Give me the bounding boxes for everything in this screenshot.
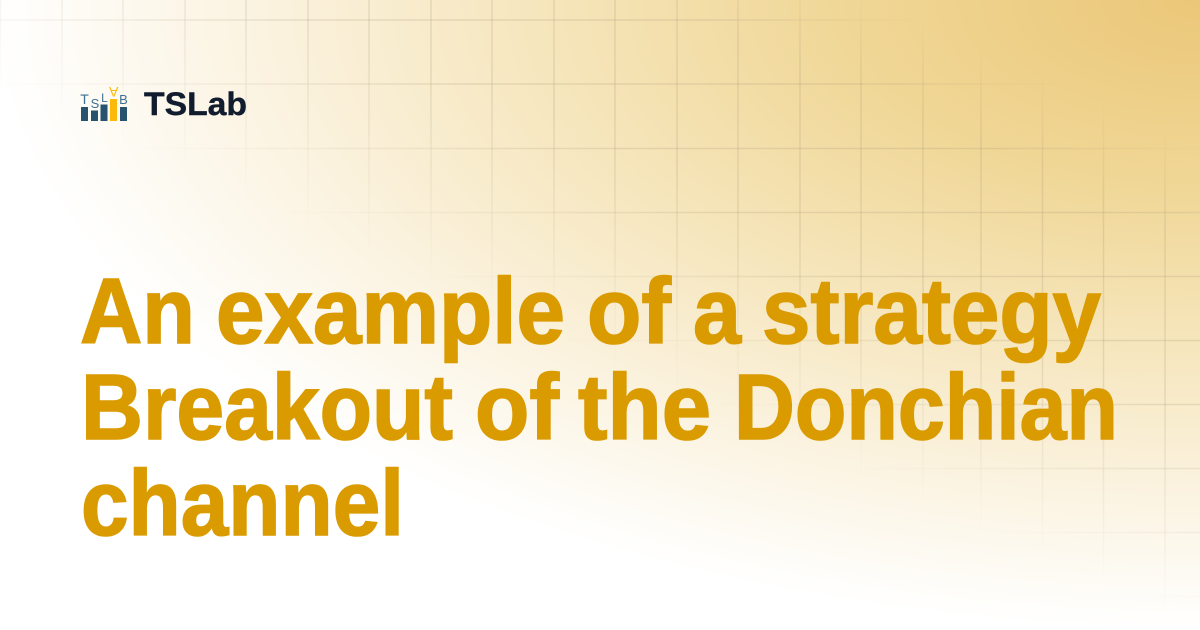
title: An	[80, 259, 195, 363]
title: Breakout	[81, 355, 453, 459]
logo: TSLab	[80, 84, 247, 122]
title	[80, 259, 1118, 555]
title: of	[475, 355, 560, 459]
icon: bar chart logo: T	[80, 91, 89, 107]
icon: bar chart logo: A	[108, 84, 118, 100]
title: of	[587, 259, 672, 363]
icon: bar chart logo: S	[91, 96, 100, 111]
icon: bar chart logo: L	[101, 91, 108, 105]
title: strategy	[762, 259, 1101, 363]
logo wordmark: TSLab	[144, 86, 247, 122]
title: Donchian	[734, 355, 1118, 459]
title: example	[216, 259, 565, 363]
icon: bar chart logo	[80, 84, 128, 121]
icon: bar chart logo: B	[119, 92, 128, 107]
title: a	[693, 259, 742, 363]
title: the	[578, 355, 711, 459]
title: channel	[81, 451, 404, 555]
